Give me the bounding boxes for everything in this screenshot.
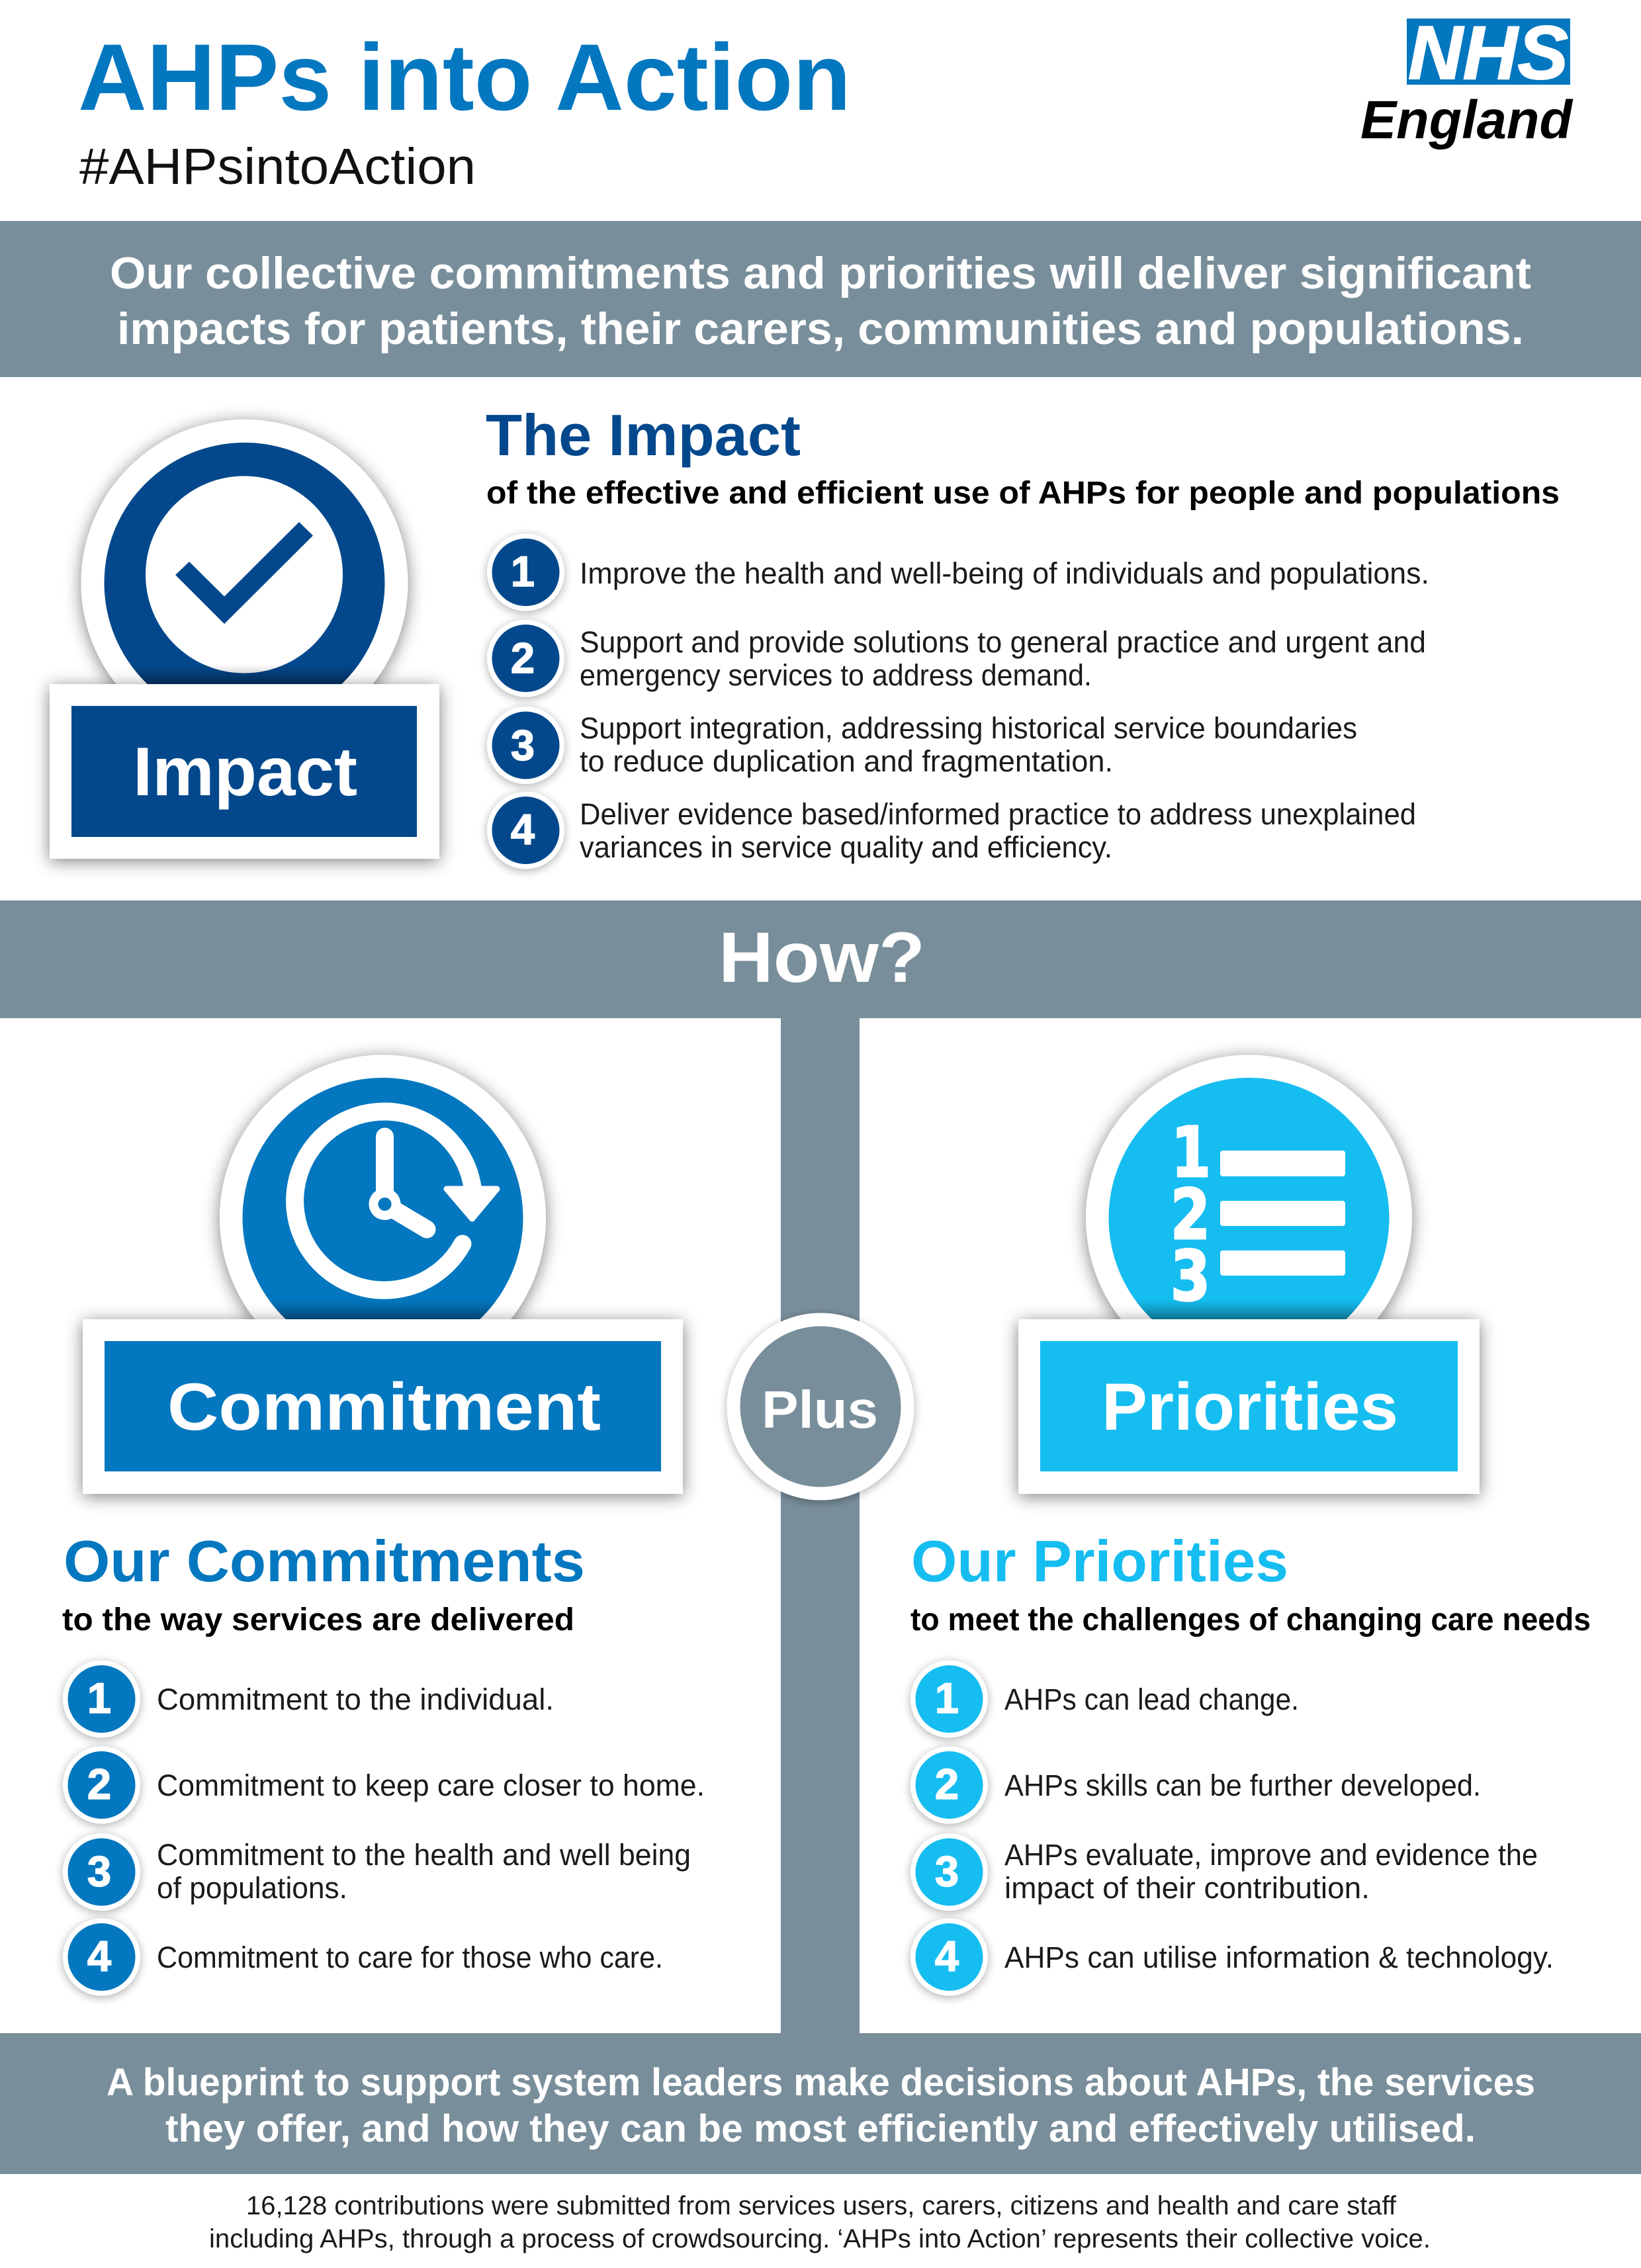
panel: priorities badge	[1018, 1055, 1480, 1494]
NHS England logo	[1360, 11, 1574, 150]
item 3: to reduce duplication and fragmentation.	[580, 744, 1113, 778]
icon: check mark	[146, 476, 343, 674]
heading: Our Priorities: Our Priorities	[911, 1528, 1288, 1594]
panel: priorities badge: Priorities	[1102, 1370, 1398, 1444]
footer note: including AHPs, through a process of crowdsourcing. ‘AHPs into Action’ represents their collective voice.	[209, 2224, 1431, 2253]
priority 2: 2	[935, 1760, 959, 1808]
list: impact items	[487, 533, 1429, 869]
NHS England logo: England	[1360, 90, 1574, 150]
priority 4	[910, 1919, 1554, 1995]
item 2: 2	[511, 634, 535, 682]
priority 4: 4	[935, 1932, 959, 1980]
item 1	[487, 533, 1429, 611]
list: priorities	[910, 1661, 1554, 1995]
priority 1: AHPs can lead change.	[1004, 1682, 1299, 1716]
panel: commitment badge: Commitment	[167, 1370, 601, 1444]
item 2	[487, 619, 1426, 697]
priority 3: AHPs evaluate, improve and evidence the	[1004, 1838, 1538, 1872]
priority 3: impact of their contribution.	[1004, 1871, 1370, 1905]
item 4: Deliver evidence based/informed practice to address unexplained	[580, 797, 1416, 831]
icon: numbered list: 1	[1171, 1112, 1211, 1193]
priority 2: AHPs skills can be further developed.	[1004, 1768, 1481, 1802]
list: commitments	[63, 1661, 705, 1995]
commitment 1: Commitment to the individual.	[157, 1682, 554, 1716]
commitment 4: Commitment to care for those who care.	[157, 1941, 663, 1974]
panel: impact badge	[50, 419, 439, 859]
banner: How?	[0, 900, 1641, 1018]
heading: The Impact: The Impact	[486, 402, 801, 468]
priority 2	[910, 1747, 1481, 1823]
commitment 2: 2	[87, 1760, 111, 1808]
banner: How?: How?	[719, 917, 925, 997]
title: AHPs into Action	[78, 25, 851, 130]
priority 1	[910, 1661, 1299, 1737]
NHS England logo: NHS	[1408, 11, 1568, 95]
item 3	[487, 707, 1357, 784]
icon: numbered list	[1171, 1112, 1345, 1317]
footer note	[209, 2191, 1431, 2253]
banner: blueprint: A blueprint to support system leaders make decisions about AHPs, the services	[107, 2061, 1535, 2104]
item 3: 3	[511, 721, 535, 769]
commitment 1: 1	[87, 1674, 111, 1722]
commitment 3: 3	[87, 1847, 111, 1896]
heading: Our Commitments: Our Commitments	[64, 1528, 585, 1594]
icon: clock with arrow	[295, 1112, 497, 1290]
commitment 3: of populations.	[157, 1871, 347, 1905]
subheading: commitments: to the way services are delivered	[62, 1602, 574, 1637]
banner: collective commitments	[0, 221, 1641, 377]
priority 1: 1	[935, 1674, 959, 1722]
icon: numbered list: 2	[1171, 1174, 1210, 1255]
item 4: 4	[511, 805, 535, 853]
priority 4: AHPs can utilise information & technology.	[1004, 1941, 1554, 1974]
badge: Plus: Plus	[762, 1380, 878, 1439]
priority 3: 3	[935, 1847, 959, 1896]
commitment 2	[63, 1747, 705, 1823]
icon: numbered list: 3	[1171, 1236, 1210, 1317]
commitment 1	[63, 1661, 554, 1737]
commitment 3: Commitment to the health and well being	[157, 1838, 691, 1872]
banner: blueprint: they offer, and how they can be most efficiently and effectively utilised.	[165, 2107, 1476, 2150]
commitment 2: Commitment to keep care closer to home.	[157, 1768, 705, 1802]
panel: commitment badge	[83, 1055, 683, 1494]
banner: collective commitments: impacts for patients, their carers, communities and populations.	[117, 304, 1524, 354]
commitment 3	[63, 1833, 691, 1911]
banner: blueprint	[0, 2033, 1641, 2174]
centre divider bar	[781, 1018, 860, 2034]
hashtag: #AHPsintoAction	[79, 138, 476, 195]
panel: impact badge: Impact	[133, 734, 357, 810]
item 1: Improve the health and well-being of individuals and populations.	[580, 556, 1429, 590]
subheading: priorities: to meet the challenges of changing care needs	[910, 1602, 1591, 1637]
subheading: impact: of the effective and efficient use of AHPs for people and populations	[486, 476, 1560, 511]
item 2: Support and provide solutions to general practice and urgent and	[580, 625, 1426, 659]
footer note: 16,128 contributions were submitted from services users, carers, citizens and health and care staff	[246, 2191, 1397, 2220]
priority 3	[910, 1833, 1538, 1911]
item 4	[487, 791, 1416, 869]
badge: Plus	[727, 1313, 914, 1501]
commitment 4	[63, 1919, 663, 1995]
item 4: variances in service quality and efficiency.	[580, 830, 1112, 864]
item 3: Support integration, addressing historical service boundaries	[580, 711, 1357, 745]
item 2: emergency services to address demand.	[580, 658, 1092, 692]
banner: collective commitments: Our collective commitments and priorities will deliver significant	[110, 248, 1531, 298]
commitment 4: 4	[87, 1932, 111, 1980]
item 1: 1	[511, 547, 535, 595]
